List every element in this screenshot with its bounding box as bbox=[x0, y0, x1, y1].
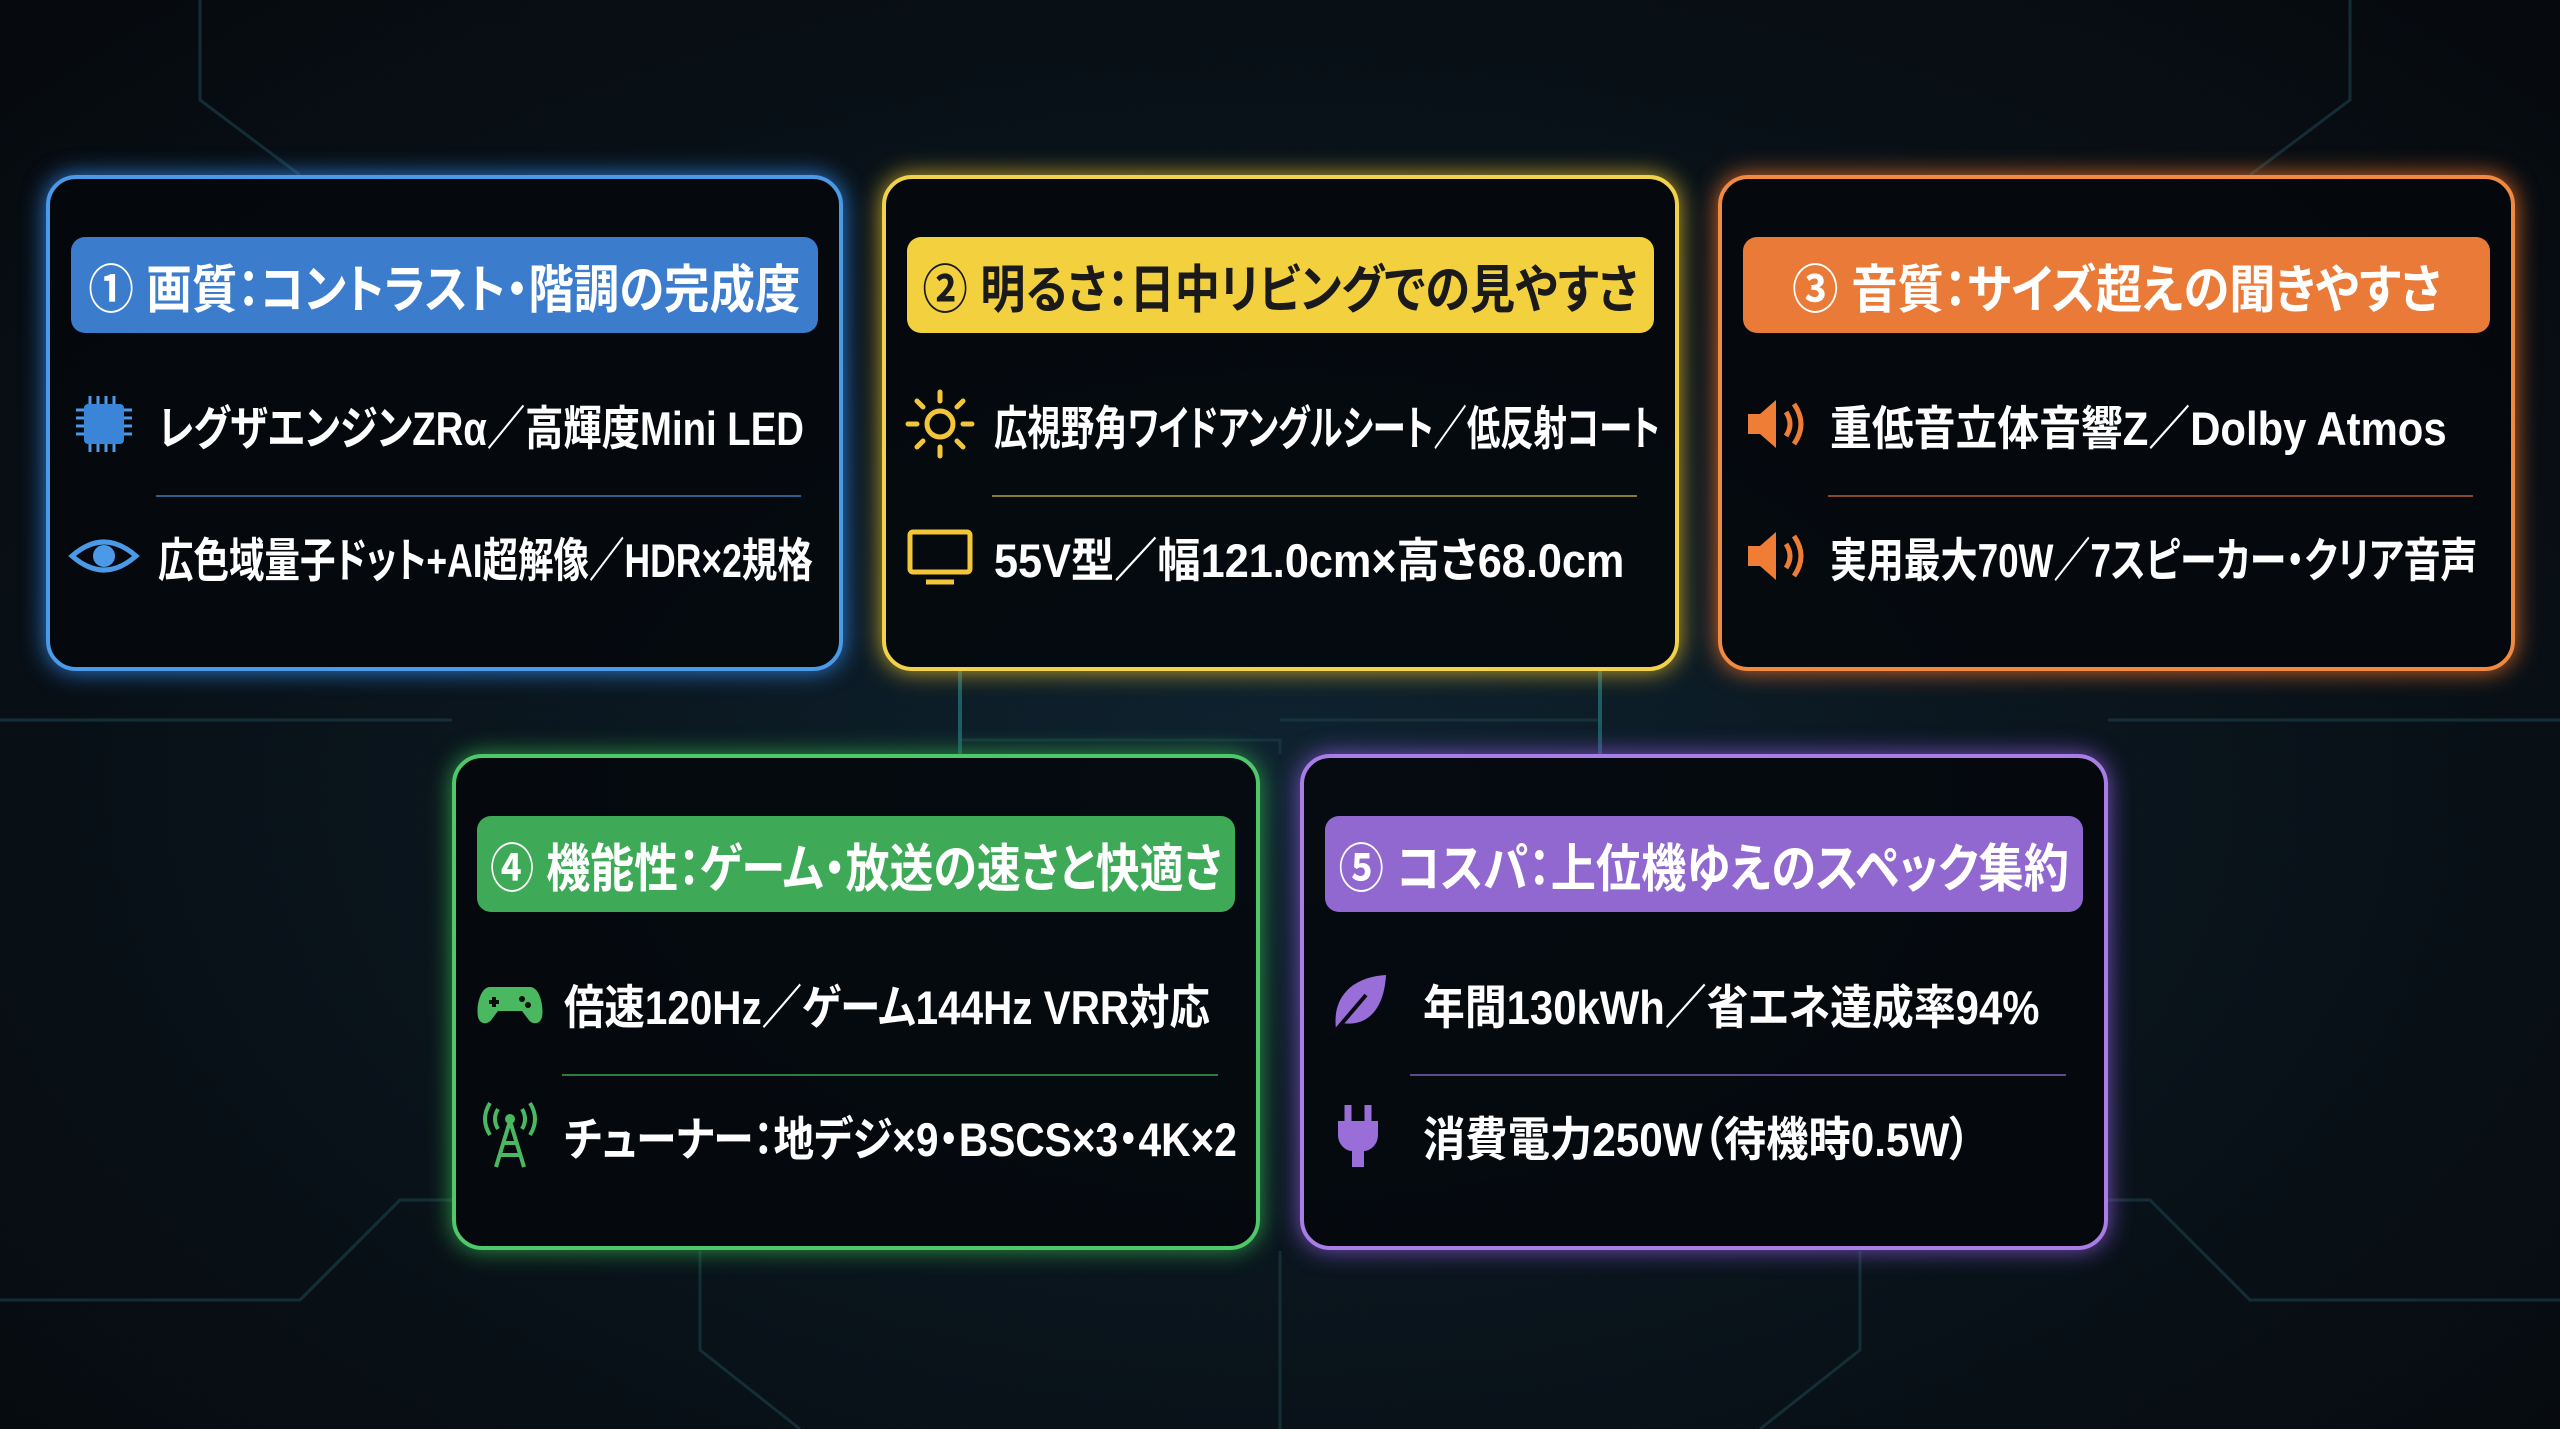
row: size: 55V型／幅121.0cm×高さ68.0cm bbox=[994, 534, 1624, 586]
heading: ① 画質：コントラスト・階調の完成度 bbox=[88, 262, 801, 320]
row: game: 倍速120Hz／ゲーム144Hz VRR対応 bbox=[564, 980, 1210, 1034]
heading: ④ 機能性：ゲーム・放送の速さと快適さ bbox=[490, 840, 1222, 898]
heading: ② 明るさ：日中リビングでの見やすさ bbox=[923, 262, 1638, 320]
row: power: 消費電力250W（待機時0.5W） bbox=[1423, 1112, 1971, 1166]
row: color: 広色域量子ドット+AI超解像／HDR×2規格 bbox=[158, 534, 813, 586]
row: wide angle bbox=[906, 390, 1660, 458]
heading bbox=[477, 816, 1235, 912]
panel: picture quality bbox=[46, 175, 843, 671]
heading bbox=[1325, 816, 2083, 912]
panel: sound bbox=[1718, 175, 2515, 671]
heading bbox=[1743, 237, 2490, 333]
row: output: 実用最大70W／7スピーカー・クリア音声 bbox=[1830, 534, 2477, 586]
heading: ③ 音質：サイズ超えの聞きやすさ bbox=[1792, 262, 2441, 320]
panel: cost performance bbox=[1300, 754, 2108, 1250]
heading bbox=[907, 237, 1654, 333]
panel: brightness bbox=[882, 175, 1679, 671]
row: wide angle: 広視野角ワイドアングルシート／低反射コート bbox=[994, 402, 1660, 454]
panel: functions bbox=[452, 754, 1260, 1250]
row: tuner: チューナー：地デジ×9・BSCS×3・4K×2 bbox=[564, 1112, 1237, 1166]
row: engine: レグザエンジンZRα／高輝度Mini LED bbox=[158, 402, 804, 454]
row: energy: 年間130kWh／省エネ達成率94% bbox=[1423, 980, 2039, 1034]
heading: ⑤ コスパ：上位機ゆえのスペック集約 bbox=[1339, 840, 2069, 898]
heading bbox=[71, 237, 818, 333]
row: speakers: 重低音立体音響Z／Dolby Atmos bbox=[1830, 402, 2447, 454]
